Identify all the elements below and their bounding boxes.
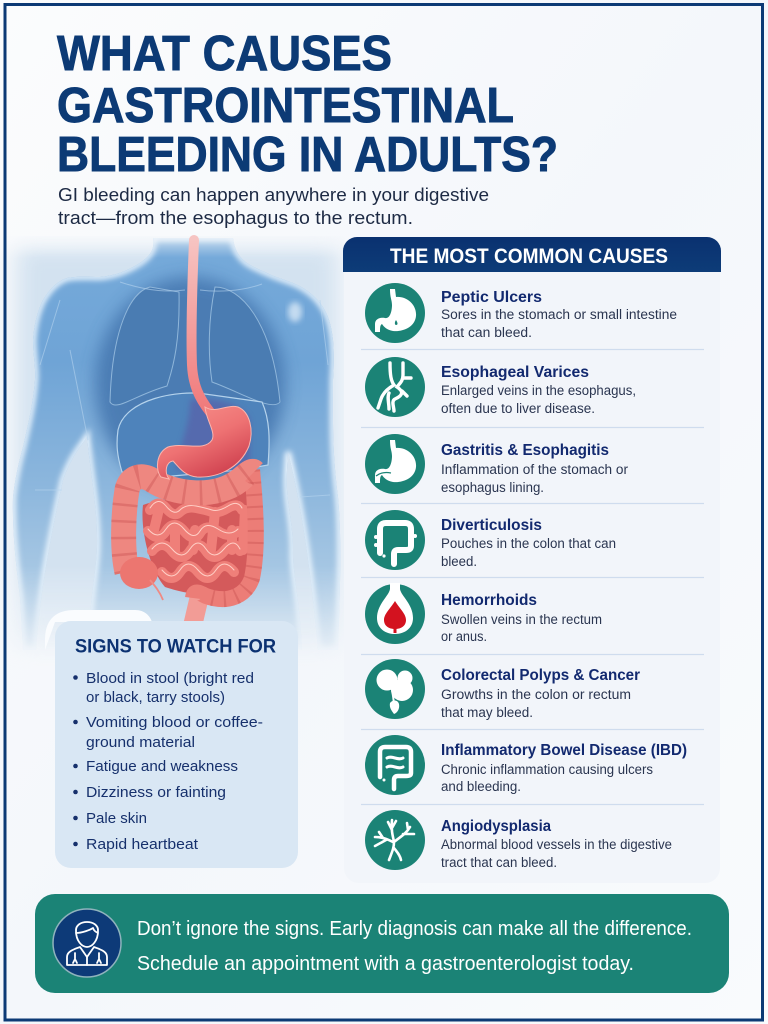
esophagus bbox=[192, 240, 210, 412]
text: colorectal polyps and cancer: that may bleed. bbox=[441, 705, 533, 720]
text: angiodysplasia: Angiodysplasia bbox=[441, 818, 551, 835]
text: diverticulosis: Pouches in the colon that can bbox=[441, 536, 616, 551]
icon: diverticulosis colon bbox=[365, 510, 425, 570]
title bbox=[57, 27, 558, 182]
text: gastritis and esophagitis: esophagus lining. bbox=[441, 480, 544, 495]
callout text bbox=[137, 918, 692, 975]
callout text: Schedule an appointment with a gastroenterologist today. bbox=[137, 953, 634, 975]
text: inflammatory bowel disease: Inflammatory Bowel Disease (IBD) bbox=[441, 742, 687, 759]
text: hemorrhoids: Hemorrhoids bbox=[441, 592, 537, 609]
causes header: THE MOST COMMON CAUSES bbox=[390, 245, 668, 268]
icon: angiodysplasia vessels bbox=[365, 810, 425, 870]
icon: colorectal polyps bbox=[365, 659, 425, 719]
signs list: or black, tarry stools) bbox=[86, 689, 225, 706]
text: hemorrhoids: or anus. bbox=[441, 629, 487, 644]
signs list: Pale skin bbox=[86, 810, 147, 827]
text: inflammatory bowel disease: and bleeding. bbox=[441, 779, 521, 794]
text: colorectal polyps and cancer: Growths in the colon or rectum bbox=[441, 687, 631, 702]
signs list: Rapid heartbeat bbox=[86, 836, 199, 853]
signs list: ground material bbox=[86, 734, 195, 751]
text: angiodysplasia: Abnormal blood vessels in the digestive bbox=[441, 837, 672, 852]
text: diverticulosis: Diverticulosis bbox=[441, 517, 542, 534]
signs heading: SIGNS TO WATCH FOR bbox=[75, 636, 276, 658]
text: esophageal varices: Enlarged veins in the esophagus, bbox=[441, 383, 636, 398]
text: hemorrhoids: Swollen veins in the rectum bbox=[441, 612, 602, 627]
icon: esophageal varices bbox=[365, 357, 425, 417]
text: peptic ulcers: Peptic Ulcers bbox=[441, 289, 542, 306]
text: hemorrhoids bbox=[441, 592, 602, 644]
causes header bbox=[343, 237, 721, 272]
signs list bbox=[73, 670, 263, 853]
text: peptic ulcers: that can bleed. bbox=[441, 325, 532, 340]
subtitle bbox=[58, 185, 489, 228]
signs list: Dizziness or fainting bbox=[86, 784, 226, 801]
icon: hemorrhoids blood drop bbox=[365, 583, 425, 644]
small intestine bbox=[142, 488, 253, 595]
text: peptic ulcers bbox=[441, 289, 677, 340]
text: esophageal varices: Esophageal Varices bbox=[441, 364, 589, 381]
subtitle: tract—from the esophagus to the rectum. bbox=[58, 208, 413, 228]
title: BLEEDING IN ADULTS? bbox=[57, 128, 558, 182]
title: GASTROINTESTINAL bbox=[57, 79, 514, 133]
callout text: Don’t ignore the signs. Early diagnosis can make all the difference. bbox=[137, 918, 692, 940]
text: colorectal polyps and cancer bbox=[441, 667, 640, 720]
text: angiodysplasia bbox=[441, 818, 672, 870]
text: gastritis and esophagitis bbox=[441, 442, 628, 495]
panel: most common causes bbox=[343, 237, 721, 883]
text: diverticulosis bbox=[441, 517, 616, 569]
signs list: Fatigue and weakness bbox=[86, 758, 238, 775]
signs list: Blood in stool (bright red bbox=[86, 670, 254, 687]
icon: gastritis stomach bbox=[365, 434, 425, 494]
illustration: human torso with digestive tract bbox=[0, 236, 345, 656]
icon: peptic ulcer stomach bbox=[365, 283, 425, 343]
text: diverticulosis: bleed. bbox=[441, 554, 477, 569]
stomach bbox=[157, 406, 251, 479]
icon: doctor bbox=[53, 909, 121, 977]
signs list: Vomiting blood or coffee- bbox=[86, 714, 263, 731]
subtitle: GI bleeding can happen anywhere in your digestive bbox=[58, 185, 489, 205]
text: colorectal polyps and cancer: Colorectal Polyps & Cancer bbox=[441, 667, 640, 684]
callout banner bbox=[35, 894, 729, 993]
colon bbox=[120, 470, 256, 624]
text: gastritis and esophagitis: Inflammation of the stomach or bbox=[441, 462, 628, 477]
panel: signs to watch for bbox=[45, 610, 298, 868]
title: WHAT CAUSES bbox=[57, 27, 392, 81]
icon: inflammatory bowel disease bbox=[365, 735, 425, 795]
text: gastritis and esophagitis: Gastritis & Esophagitis bbox=[441, 442, 609, 459]
text: peptic ulcers: Sores in the stomach or small intestine bbox=[441, 307, 677, 322]
text: esophageal varices bbox=[441, 364, 636, 416]
text: esophageal varices: often due to liver disease. bbox=[441, 401, 595, 416]
text: inflammatory bowel disease: Chronic inflammation causing ulcers bbox=[441, 762, 653, 777]
text: angiodysplasia: tract that can bleed. bbox=[441, 855, 557, 870]
text: inflammatory bowel disease bbox=[441, 742, 687, 794]
